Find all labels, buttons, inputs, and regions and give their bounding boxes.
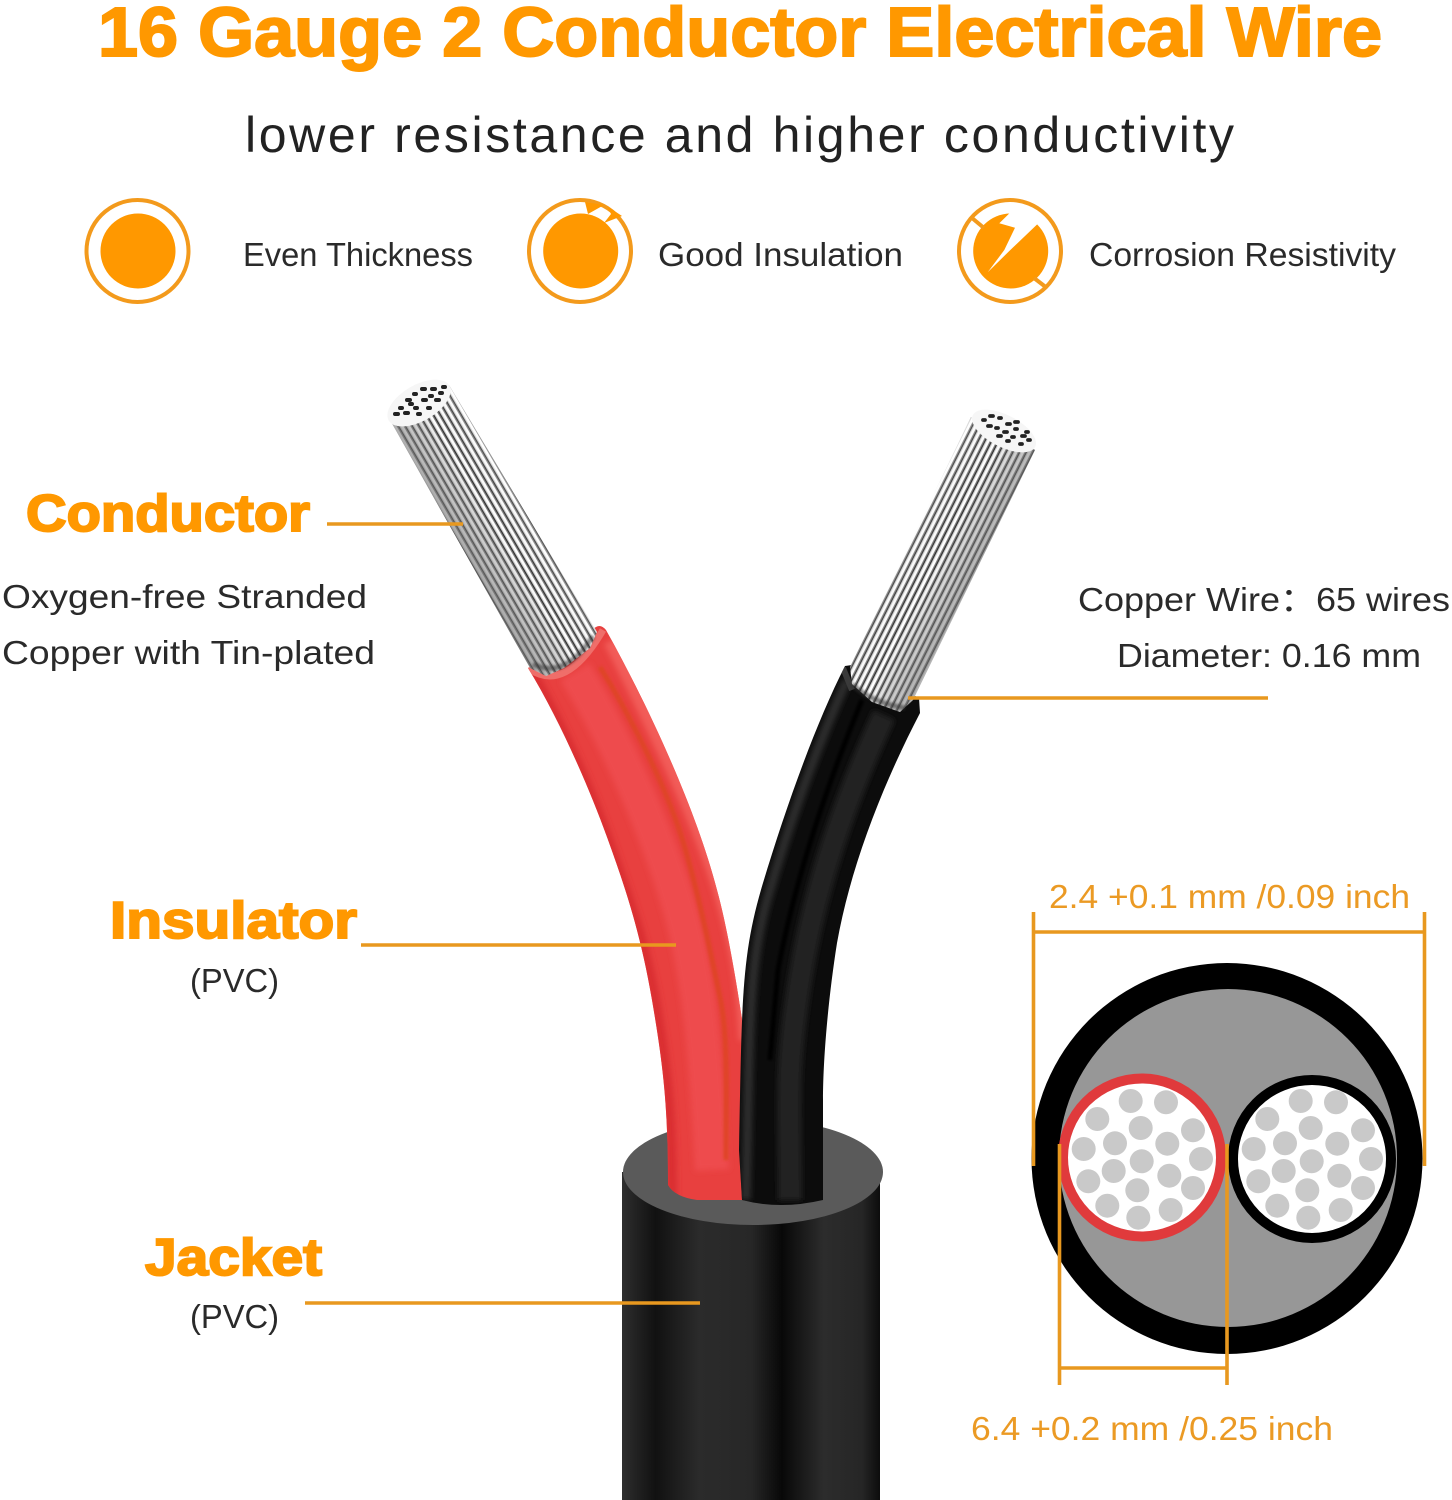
copper wire spec: Diameter: 0.16 mm	[1117, 637, 1421, 674]
jacket heading: Jacket	[145, 1229, 322, 1287]
conductor description: Oxygen-free Stranded	[2, 578, 367, 615]
jacket leader line	[305, 1301, 700, 1305]
jacket top face	[623, 1119, 883, 1225]
black core	[1233, 1080, 1391, 1238]
outer sheath	[1032, 963, 1422, 1354]
copper wire spec: Copper Wire：65 wires	[1078, 581, 1450, 618]
feature label: good insulation: Good Insulation	[658, 236, 903, 273]
insulator heading: Insulator	[110, 892, 357, 950]
outer diameter dimension	[1033, 878, 1425, 1166]
feature label: corrosion resistivity: Corrosion Resistivity	[1089, 236, 1396, 273]
outer jacket body	[622, 1172, 880, 1500]
copper wire spec	[908, 581, 1450, 698]
callout: insulator	[110, 892, 676, 999]
filler	[1059, 989, 1397, 1327]
conductor heading: Conductor	[26, 485, 310, 543]
feature label: even thickness: Even Thickness	[243, 236, 473, 273]
insulator leader line	[361, 943, 676, 947]
red insulated wire	[528, 626, 742, 1200]
core diameter dimension: 6.4 +0.2 mm /0.25 inch	[971, 1410, 1333, 1447]
conductor description: Copper with Tin-plated	[2, 634, 375, 671]
icon: good insulation	[529, 200, 631, 302]
outer diameter dimension: 2.4 +0.1 mm /0.09 inch	[1049, 878, 1410, 915]
conductor leader line	[327, 522, 463, 526]
jacket material: (PVC)	[190, 1298, 279, 1335]
red core	[1063, 1078, 1221, 1236]
subtitle: lower resistance and higher conductivity	[245, 107, 1234, 163]
cable illustration	[380, 370, 1042, 1500]
right conductor strands	[850, 401, 1042, 712]
left conductor strands	[380, 370, 597, 676]
insulator material: (PVC)	[190, 962, 279, 999]
cross-section diagram	[971, 878, 1425, 1447]
black insulated wire	[739, 665, 920, 1205]
conductor description	[2, 578, 375, 671]
callout: jacket	[145, 1229, 700, 1335]
icon: corrosion resistivity	[959, 200, 1061, 302]
core diameter dimension	[971, 1144, 1333, 1447]
icon: even thickness	[86, 200, 188, 302]
